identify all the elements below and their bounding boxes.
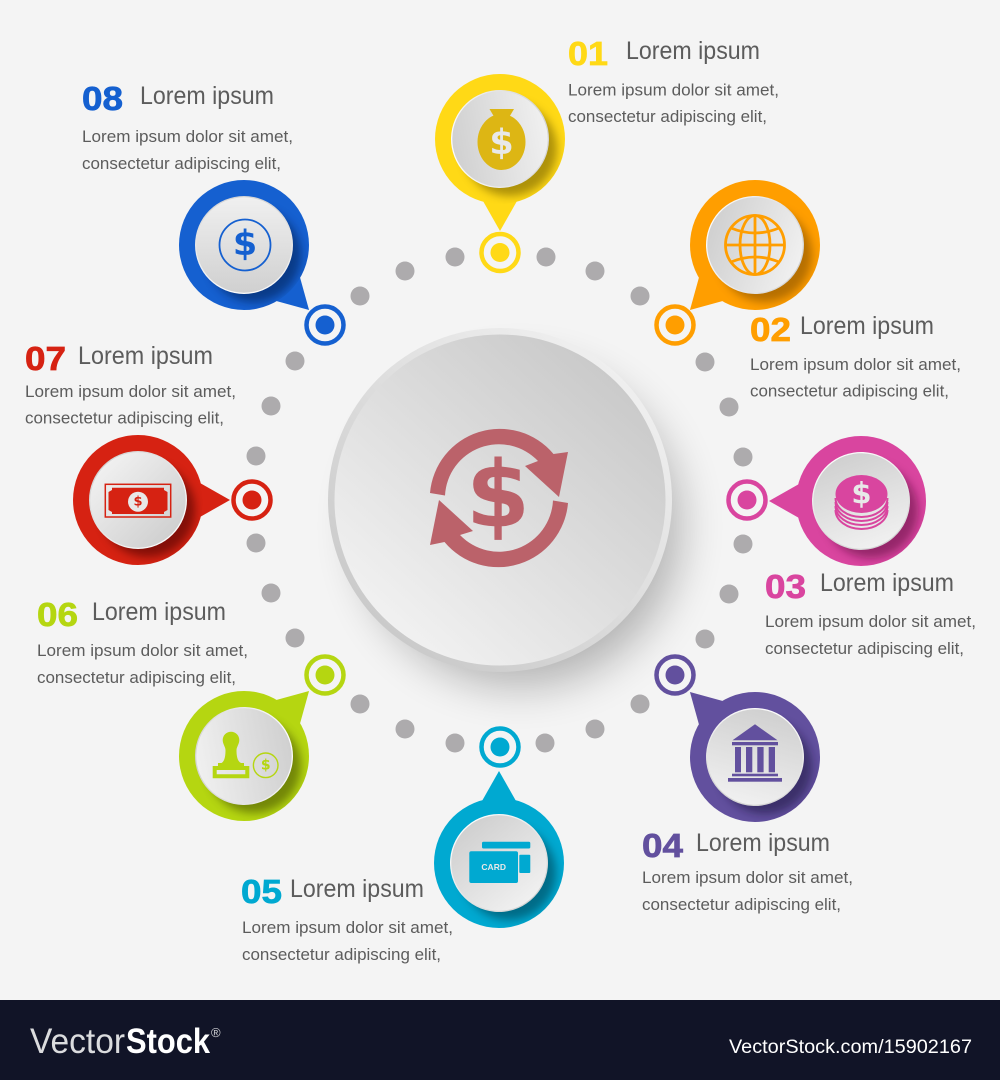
text block 08: Lorem ipsum [140, 82, 274, 110]
text block 03 [765, 568, 976, 658]
pin 08: dollar circle [179, 180, 309, 310]
pin 02: globe [690, 180, 820, 310]
text block 01: consectetur adipiscing elit, [568, 107, 767, 126]
pin 04: bank [690, 692, 820, 822]
node 04 [656, 656, 694, 694]
icon: circular arrows with dollar [430, 429, 568, 567]
text block 01: 01 [568, 35, 608, 72]
footer bar [0, 1000, 1000, 1080]
text block 04: Lorem ipsum dolor sit amet, [642, 868, 853, 887]
text block 06: 06 [37, 596, 78, 633]
text block 08: Lorem ipsum dolor sit amet, [82, 127, 293, 146]
text block 02: Lorem ipsum dolor sit amet, [750, 355, 961, 374]
node 05 [482, 728, 518, 766]
icon: coin stack: $ [851, 477, 872, 511]
text block 05: consectetur adipiscing elit, [242, 945, 441, 964]
text block 04: Lorem ipsum [696, 829, 830, 857]
text block 07: consectetur adipiscing elit, [25, 408, 224, 428]
footer logo: ® [211, 1025, 221, 1040]
node 07 [234, 482, 270, 518]
icon: stamp with dollar coin: $ [261, 758, 271, 774]
text block 04: consectetur adipiscing elit, [642, 895, 841, 914]
icon: circular arrows with dollar: $ [466, 442, 530, 548]
text block 01: Lorem ipsum [626, 37, 760, 65]
icon: coin stack [836, 475, 888, 529]
text block 02: consectetur adipiscing elit, [750, 382, 949, 400]
text block 07: Lorem ipsum [78, 342, 213, 370]
text block 02 [750, 311, 961, 400]
icon: dollar in circle: $ [233, 224, 257, 264]
icon: banknote: $ [133, 495, 143, 510]
footer logo: Stock [126, 1022, 210, 1061]
node 01 [482, 234, 518, 271]
node 06 [306, 656, 344, 694]
icon: money bag: $ [489, 123, 514, 163]
text block 07: 07 [25, 340, 66, 377]
icon: cards: CARD [481, 862, 506, 872]
icon: cards [469, 842, 530, 883]
text block 06: Lorem ipsum [92, 598, 226, 626]
text block 06: Lorem ipsum dolor sit amet, [37, 641, 248, 660]
pin 03: coins [769, 436, 926, 566]
text block 08 [82, 80, 293, 173]
node 02 [656, 306, 694, 344]
text block 02: Lorem ipsum [800, 312, 934, 340]
text block 05: 05 [241, 873, 282, 910]
icon: dollar in circle [220, 220, 270, 270]
text block 05: Lorem ipsum dolor sit amet, [242, 918, 453, 937]
text block 04 [642, 827, 853, 914]
text block 07 [25, 340, 236, 428]
text block 03: 03 [765, 568, 806, 605]
pin 01: money bag [435, 74, 565, 231]
pin 06: stamp [179, 691, 309, 821]
icon: stamp with dollar coin [213, 732, 278, 778]
text block 05: Lorem ipsum [290, 875, 424, 903]
text block 01 [568, 35, 779, 126]
central disc with exchange icon [328, 328, 680, 686]
text block 06: consectetur adipiscing elit, [37, 668, 236, 687]
icon: banknote [105, 484, 171, 517]
pin 05: credit cards [430, 771, 568, 932]
pin 07: banknote [69, 431, 230, 569]
footer logo [30, 1022, 221, 1061]
text block 03: Lorem ipsum dolor sit amet, [765, 612, 976, 631]
node 08 [306, 306, 344, 344]
node 03 [728, 482, 766, 518]
text block 08: consectetur adipiscing elit, [82, 154, 281, 173]
text block 03: Lorem ipsum [820, 569, 954, 597]
text block 07: Lorem ipsum dolor sit amet, [25, 382, 236, 401]
text block 02: 02 [750, 311, 791, 348]
text block 06 [37, 596, 248, 687]
text block 01: Lorem ipsum dolor sit amet, [568, 80, 779, 100]
icon: money bag [478, 109, 526, 170]
text block 03: consectetur adipiscing elit, [765, 639, 964, 658]
icon: bank building [728, 724, 782, 782]
text block 08: 08 [82, 80, 123, 117]
footer logo: Vector [30, 1022, 125, 1061]
icon: globe [726, 216, 784, 274]
text block 05 [241, 873, 453, 964]
footer url: VectorStock.com/15902167 [729, 1037, 972, 1058]
text block 04: 04 [642, 827, 684, 864]
dotted ring of grey dots [246, 248, 752, 752]
